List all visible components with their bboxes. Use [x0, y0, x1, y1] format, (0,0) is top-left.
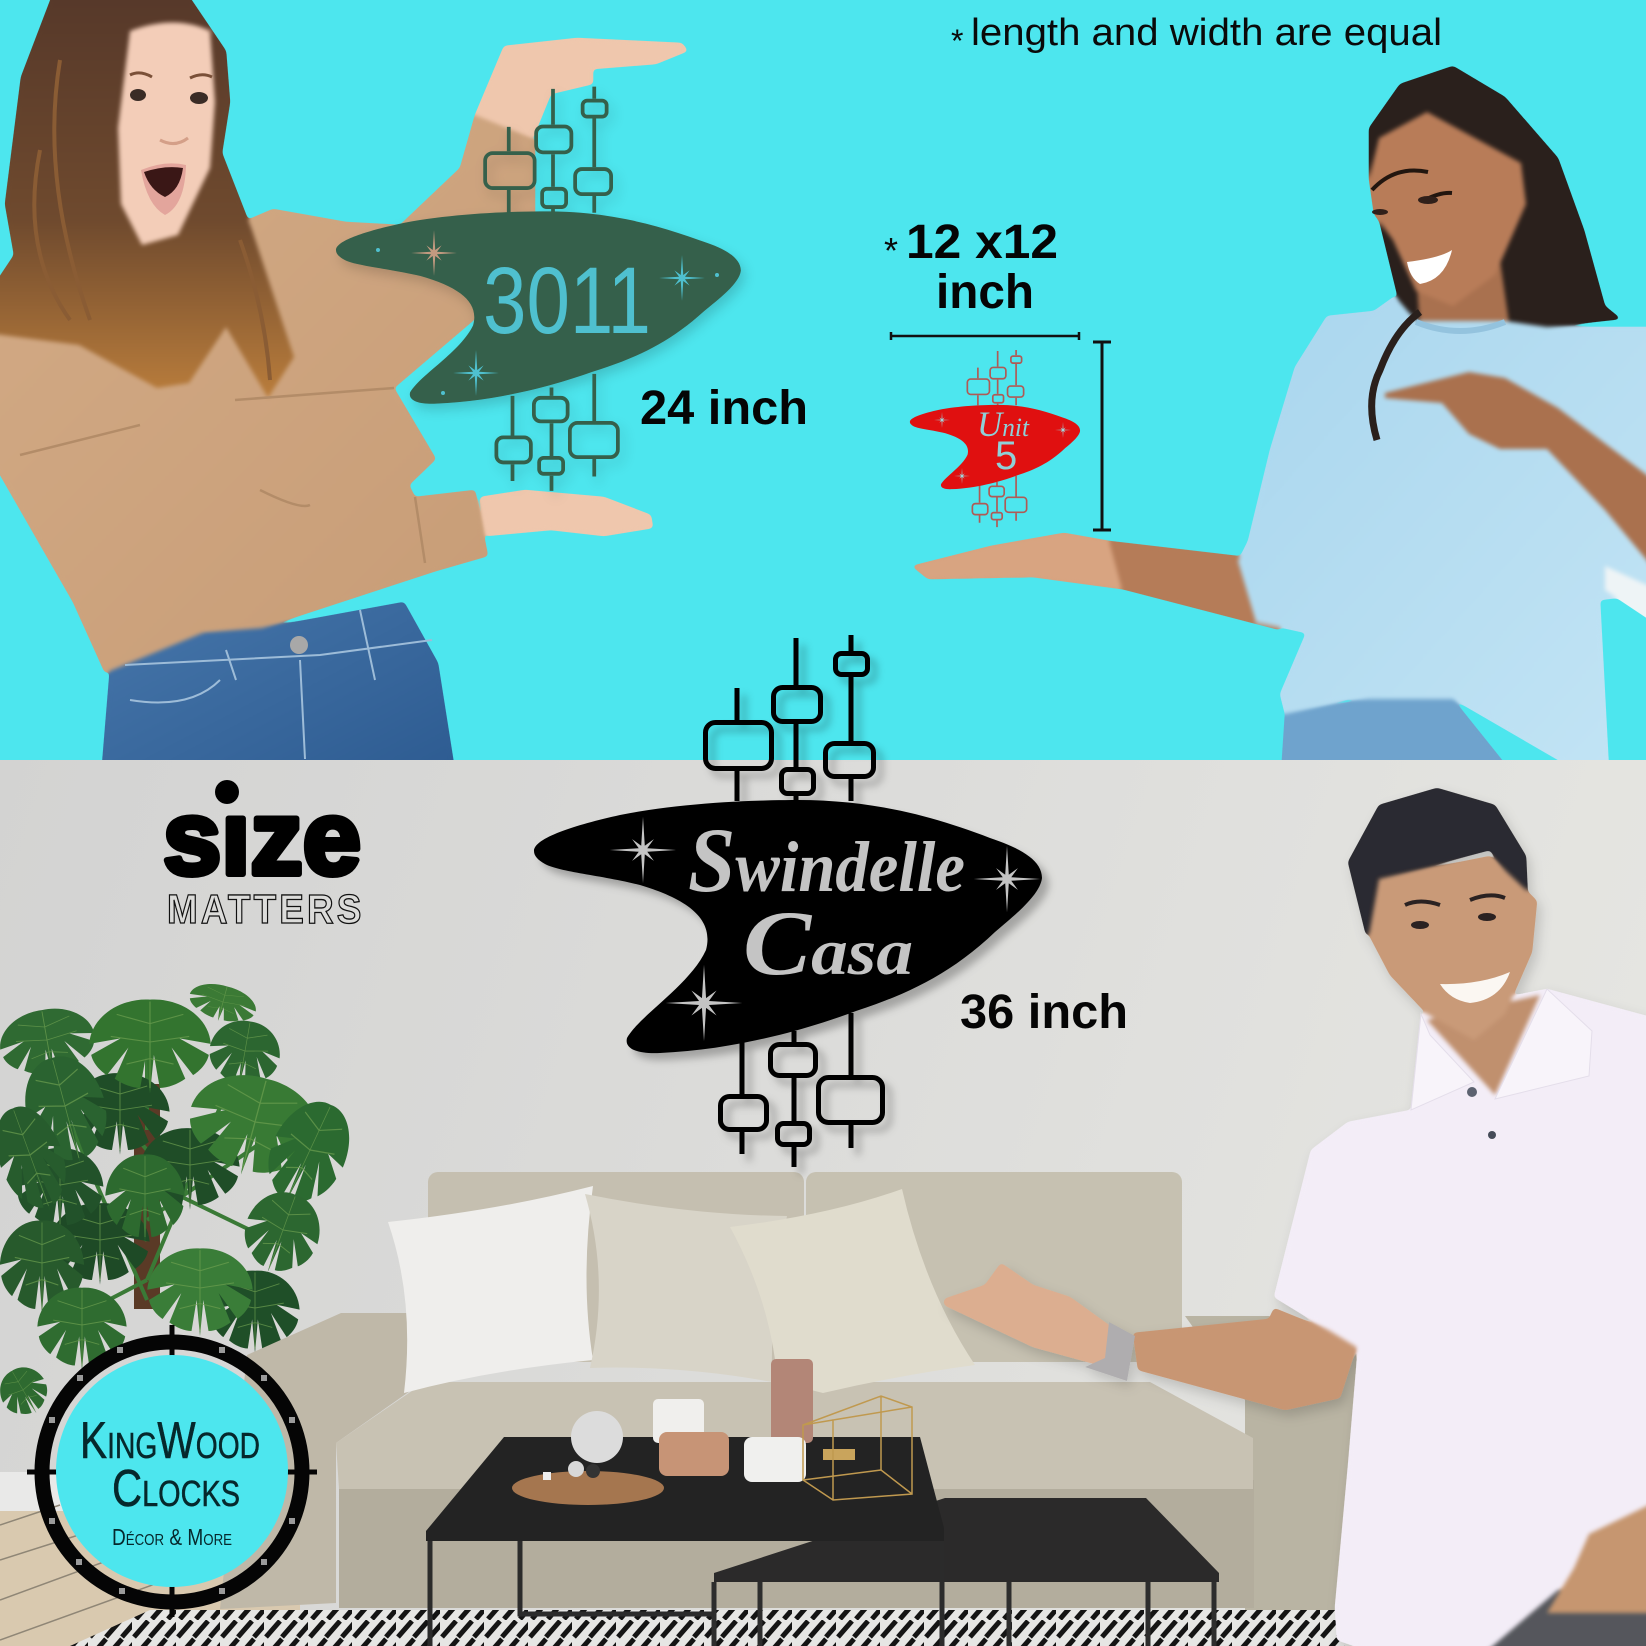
pants: [1453, 1590, 1646, 1646]
person: man right: [944, 788, 1646, 1646]
face: [1369, 856, 1537, 1040]
living room panel: [0, 760, 1646, 1646]
sweater: [0, 115, 535, 673]
sign: red Unit 5: [910, 350, 1080, 527]
face: [1369, 112, 1526, 306]
logo: KingWood Clocks: [27, 1325, 317, 1617]
sign: red Unit 5: 5: [995, 434, 1017, 478]
cuff: [1603, 566, 1646, 618]
hair: [0, 0, 294, 398]
sign: green 3011 24 inch: [336, 87, 741, 491]
heading: size matters: size: [163, 780, 361, 897]
label: 12 x 12 inch: 12 x12: [906, 216, 1058, 269]
label: 12 x 12 inch: inch: [936, 266, 1034, 319]
sofa: [220, 1172, 1369, 1610]
neck: [1427, 995, 1540, 1095]
rug: [70, 1610, 1345, 1646]
sweater: [1238, 296, 1646, 790]
dimension line vertical: [1093, 342, 1111, 530]
neck: [140, 220, 205, 285]
logo: KingWood Clocks: Décor & More: [112, 1524, 232, 1550]
label: 12 x 12 inch: *: [884, 230, 898, 271]
label: 24 inch: 24 inch: [640, 382, 808, 435]
sign: black Swindelle Casa: Casa: [743, 892, 913, 994]
jeans: [102, 602, 454, 760]
logo: KingWood Clocks: Clocks: [112, 1460, 240, 1518]
person: woman right: [912, 66, 1646, 790]
arm extended: [912, 533, 1280, 630]
arm pointing: [1382, 369, 1646, 564]
face: [118, 22, 215, 245]
label: 36 inch: 36 inch: [960, 986, 1128, 1039]
logo: KingWood Clocks: KingWood: [80, 1412, 260, 1470]
sign: red Unit 5: Unit: [977, 404, 1030, 444]
hair back: [1369, 66, 1621, 330]
note: length and width are equal: *: [951, 23, 963, 59]
sign: black Swindelle Casa: Swindelle: [688, 809, 965, 911]
pillows: [388, 1186, 975, 1393]
sign: black Swindelle Casa: [534, 635, 1042, 1167]
plant: [0, 978, 365, 1425]
hair: [1348, 788, 1528, 935]
person: woman left: [0, 0, 688, 790]
dimension line horizontal: [891, 332, 1079, 340]
hip hand: [1547, 1490, 1646, 1613]
sign: green 3011 24 inch: 3011: [483, 248, 651, 354]
heading: size matters: MATTERS: [167, 887, 361, 932]
arm: [1133, 1308, 1358, 1410]
hand extended: [912, 533, 1122, 589]
jeans: [1280, 699, 1526, 790]
top cyan panel: [0, 0, 1646, 760]
neck: [1416, 260, 1510, 330]
hand: [944, 1263, 1117, 1367]
coffee tables: [426, 1437, 1219, 1646]
label: 12 x 12 inch: [884, 216, 1058, 319]
hand upper: [475, 38, 688, 138]
hand lower: [480, 490, 653, 536]
table decor: [512, 1359, 912, 1505]
shirt: [1274, 989, 1646, 1646]
note: length and width are equal: length and width are equal: [971, 12, 1442, 54]
